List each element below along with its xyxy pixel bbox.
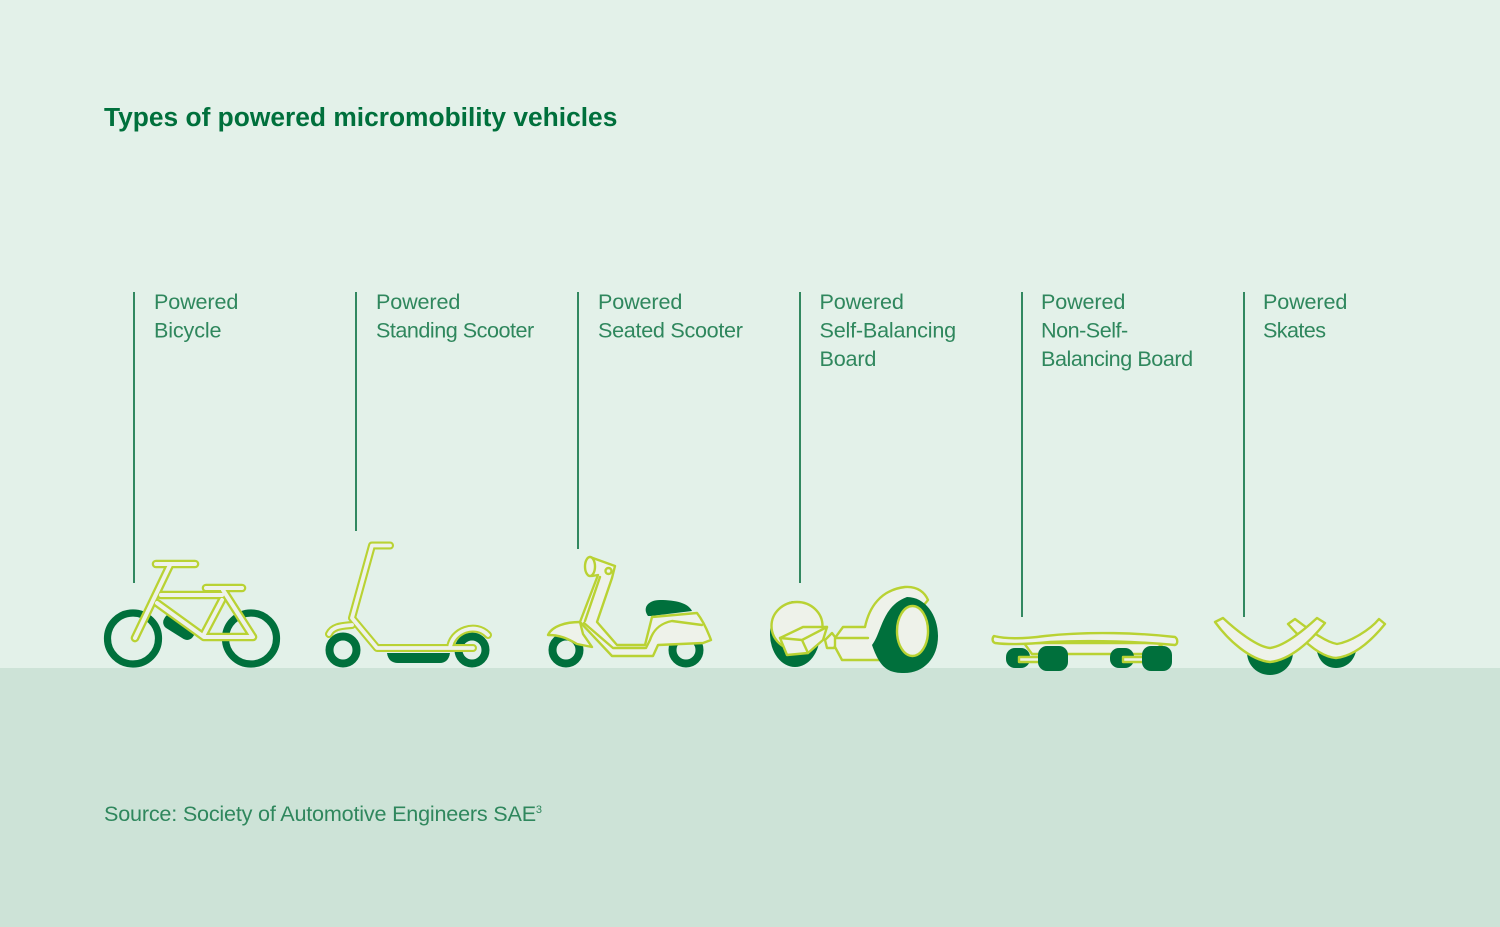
label: powered standing scooter: Standing Scooter [376,318,534,343]
source note: 3 [536,804,542,816]
label: powered self-balancing board: Self-Balancing [820,318,956,343]
label: powered non-self-balancing board: Non-Self- [1041,318,1128,343]
leader line: self-balancing board [799,292,801,583]
icon: seated scooter [548,557,711,664]
leader line: standing scooter [355,292,357,531]
label: powered bicycle: Powered [154,289,238,314]
label: powered non-self-balancing board: Powered [1041,289,1125,314]
leader line: non-self-balancing board [1021,292,1023,617]
source note: Source: Society of Automotive Engineers SAE [104,801,536,826]
column: powered skates [1215,289,1385,675]
label: powered non-self-balancing board: Balancing Board [1041,346,1193,371]
label: powered self-balancing board: Powered [820,289,904,314]
label: powered self-balancing board: Board [820,346,876,371]
label: powered skates: Skates [1263,318,1326,343]
leader line: skates [1243,292,1245,617]
column: powered non-self-balancing board [993,289,1193,671]
label: powered seated scooter: Seated Scooter [598,318,743,343]
icon: skateboard [993,633,1177,671]
icon: bicycle [108,564,276,664]
column: powered standing scooter [329,289,534,664]
label: powered seated scooter: Powered [598,289,682,314]
icon: self-balancing board [770,587,938,673]
column: powered bicycle [108,289,276,664]
label: powered standing scooter: Powered [376,289,460,314]
title: Types of powered micromobility vehicles [104,102,617,132]
column: powered self-balancing board [770,289,956,673]
leader line: seated scooter [577,292,579,549]
label: powered skates: Powered [1263,289,1347,314]
icon: skates [1215,618,1385,675]
column: powered seated scooter [548,289,743,664]
label: powered bicycle: Bicycle [154,318,221,343]
leader line: bicycle [133,292,135,583]
icon: standing scooter [329,546,488,664]
